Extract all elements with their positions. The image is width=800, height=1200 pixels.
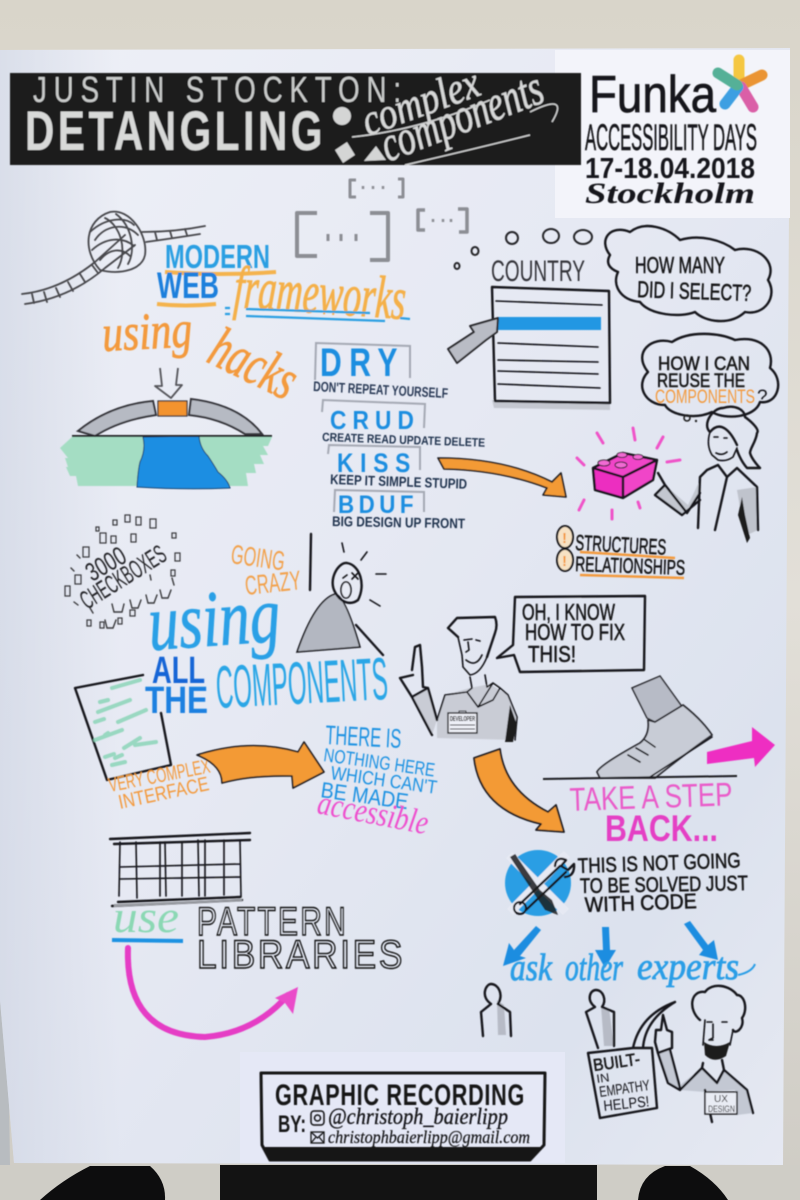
word using: using [145, 571, 283, 668]
word hacks: hacks [199, 314, 309, 412]
name badge: DEVELOPER [450, 716, 475, 723]
orange patch [158, 401, 187, 416]
neck and collar [437, 675, 517, 740]
callout text: BUILT- [592, 1050, 641, 1075]
text: take a step back: TAKE A STEP [569, 775, 733, 818]
label going crazy: CRAZY [243, 565, 302, 601]
callout text: HOW I CAN [658, 354, 750, 375]
face [703, 1020, 733, 1045]
structures and relationships [557, 526, 686, 580]
floor and shoes [0, 1165, 800, 1200]
icon: mail [311, 1132, 324, 1143]
icon: crazy person [297, 534, 386, 655]
text: nothing here which cant be made accessible: BE MADE [319, 777, 410, 814]
body and arm [658, 1050, 753, 1122]
callout: built in empathy helps: IN [595, 1070, 610, 1086]
green river bank [60, 437, 272, 486]
credit box [261, 1073, 545, 1160]
word structures: STRUCTURES [575, 530, 667, 560]
left wall strip [0, 500, 10, 1200]
Funka logo [589, 60, 762, 124]
icon: person one [481, 984, 511, 1036]
arrow: pink step forward [707, 727, 775, 767]
callout text: HOW MANY [635, 252, 725, 278]
icon: tools circle [505, 850, 574, 916]
hair [448, 617, 496, 657]
text: not solved with code [577, 849, 748, 917]
text: ask other experts [510, 946, 755, 989]
speech text: OH, I KNOW [522, 599, 615, 625]
icon: woman holding brick [655, 407, 760, 543]
label very complex interface: INTERFACE [116, 773, 211, 814]
speech bubble: oh i know how to fix this [497, 596, 645, 672]
body [698, 465, 758, 530]
shape: triangle [364, 146, 386, 161]
credit heading: GRAPHIC RECORDING [275, 1079, 525, 1112]
icon: exclamation 2: ! [562, 553, 567, 570]
KISS: KISS [337, 448, 417, 478]
BDUF: BDUF [338, 491, 418, 519]
river [137, 436, 230, 489]
credit email: christophbaierlipp@gmail.com [328, 1127, 530, 1147]
label very complex interface [107, 756, 212, 814]
graphic recording poster photograph: COMPONENTS [214, 645, 389, 721]
heading using all the components [145, 571, 389, 722]
logo patch [555, 50, 790, 218]
icon: bridge [60, 399, 272, 489]
label 3000: 3000 [80, 540, 131, 587]
title banner [10, 57, 581, 172]
credit handle: @christoph_baierlipp [328, 1104, 508, 1129]
shape: circle [333, 107, 351, 125]
badge: DESIGN [708, 1104, 735, 1114]
icon: complex document [75, 675, 171, 780]
acronym list: BIG DESIGN UP FRONT [332, 513, 466, 531]
acronym list: DON'T REPEAT YOURSELF [313, 378, 449, 401]
callout: how can i reuse the components: ? [757, 387, 768, 408]
DRY: DRY [320, 341, 405, 385]
arch right [189, 399, 262, 434]
word pattern: PATTERN [197, 900, 348, 944]
text: take a step back [569, 775, 733, 849]
speech bubble: oh i know how to fix this: THIS! [528, 641, 576, 667]
label going crazy [229, 539, 302, 601]
hair [707, 407, 760, 468]
icon: dropdown list [492, 287, 610, 410]
frames [315, 343, 425, 512]
icon: person two [586, 990, 614, 1048]
thought bubbles [454, 229, 592, 269]
board shading [0, 50, 120, 1164]
hair [692, 986, 745, 1032]
heading detangling: DETANGLING [25, 99, 326, 162]
text: nothing here which cant be made accessible: NOTHING HERE [322, 745, 436, 782]
word frameworks: frameworks [232, 254, 408, 332]
event city: Stockholm [585, 177, 755, 210]
arrow: pink curved [128, 948, 298, 1037]
callout: built in empathy helps [588, 1002, 675, 1118]
label: country: COUNTRY [491, 255, 585, 288]
ground line [543, 776, 737, 779]
badge: UX [714, 1094, 728, 1105]
icon: foot stepping [543, 676, 737, 779]
word using: using [101, 301, 194, 363]
icon: cursor arrow [448, 318, 498, 363]
shoe [597, 705, 712, 778]
text: ask other experts: ask [510, 947, 553, 989]
event dates: 17-18.04.2018 [585, 153, 755, 185]
word accessible: accessible [314, 785, 431, 842]
icon: instagram [311, 1111, 324, 1125]
shirt [437, 684, 517, 740]
speech bubble: oh i know how to fix this: HOW TO FIX [525, 619, 625, 645]
icon: array brackets [297, 179, 467, 260]
sock [632, 676, 683, 722]
word relationships: RELATIONSHIPS [575, 553, 686, 580]
blue arrows down [503, 921, 718, 968]
scattered checkboxes [65, 515, 180, 628]
callout: how many did i select [605, 226, 771, 321]
word modern: MODERN [165, 238, 270, 275]
callout: built in empathy helps: EMPATHY [598, 1077, 651, 1101]
text: not solved with code: TO BE SOLVED JUST [580, 872, 748, 898]
word use: use [113, 891, 179, 942]
selected option [498, 317, 601, 330]
speaker name: JUSTIN STOCKTON: [33, 69, 408, 110]
callout: how can i reuse the components [642, 334, 778, 422]
wrench [520, 859, 574, 910]
icon: exclamation 1: ! [562, 530, 567, 547]
word the: THE [145, 680, 208, 722]
heading use pattern libraries [112, 891, 405, 977]
text: nothing here which cant be made accessible: WHICH CAN'T [329, 763, 439, 799]
text: take a step back: BACK... [605, 808, 718, 849]
face [458, 637, 487, 675]
icon: ux designer [655, 986, 753, 1122]
wordmark: Funka [589, 66, 716, 124]
arrow: acronyms to lego [438, 458, 566, 497]
arm [655, 473, 700, 515]
callout: built in empathy helps: HELPS! [603, 1093, 650, 1115]
icon: lego brick [577, 428, 680, 519]
arm and finger [400, 645, 437, 735]
badge [705, 1092, 737, 1114]
sleeve shading [655, 480, 700, 515]
label going crazy: GOING [229, 539, 287, 576]
heading components: components [372, 59, 551, 172]
text: not solved with code: WITH CODE [584, 890, 697, 917]
acronym list [313, 341, 485, 531]
acronym list: KEEP IT SIMPLE STUPID [330, 471, 467, 492]
face [708, 432, 737, 461]
word web: WEB [157, 265, 219, 306]
callout: how can i reuse the components: REUSE THE [657, 371, 745, 392]
word all: ALL [152, 650, 205, 692]
3000 checkboxes [65, 515, 180, 628]
text: ask other experts: other [565, 947, 623, 989]
beard [704, 1042, 730, 1060]
arrow: interface to accessible [197, 742, 324, 788]
CRUD: CRUD [330, 405, 420, 435]
logo star [718, 60, 762, 107]
arch left [78, 401, 156, 436]
icon: table grid [110, 833, 250, 907]
callout: how can i reuse the components: COMPONENTS [655, 387, 755, 408]
event text [585, 117, 757, 210]
arrow: developer to step back [474, 749, 564, 832]
heading complex: complex [355, 57, 486, 145]
label very complex interface: VERY COMPLEX [107, 756, 212, 797]
shape: diamond [335, 142, 355, 163]
credit by: BY: [278, 1111, 306, 1138]
word libraries: LIBRARIES [197, 933, 405, 977]
screwdriver [510, 854, 558, 915]
heading modern web frameworks [157, 238, 410, 332]
footer patch [240, 1052, 565, 1163]
form lines [95, 680, 156, 765]
text: not solved with code: THIS IS NOT GOING [577, 849, 741, 878]
label checkboxes: CHECKBOXES [74, 539, 172, 615]
sparkle rays [577, 428, 680, 519]
icon: developer [400, 617, 517, 742]
callout: how many did i select: DID I SELECT? [637, 276, 752, 306]
icon: hollow down arrow [155, 368, 182, 398]
icon: knot rope [22, 212, 205, 304]
heading using hacks [101, 301, 309, 412]
text: nothing here which cant be made accessible: THERE IS [325, 720, 402, 754]
hand [655, 1015, 672, 1053]
shirt shading [658, 1050, 753, 1115]
acronym list: CREATE READ UPDATE DELETE [322, 430, 485, 450]
text: ask other experts: experts [637, 946, 739, 988]
text: nothing here which cant be made accessible [314, 720, 439, 842]
